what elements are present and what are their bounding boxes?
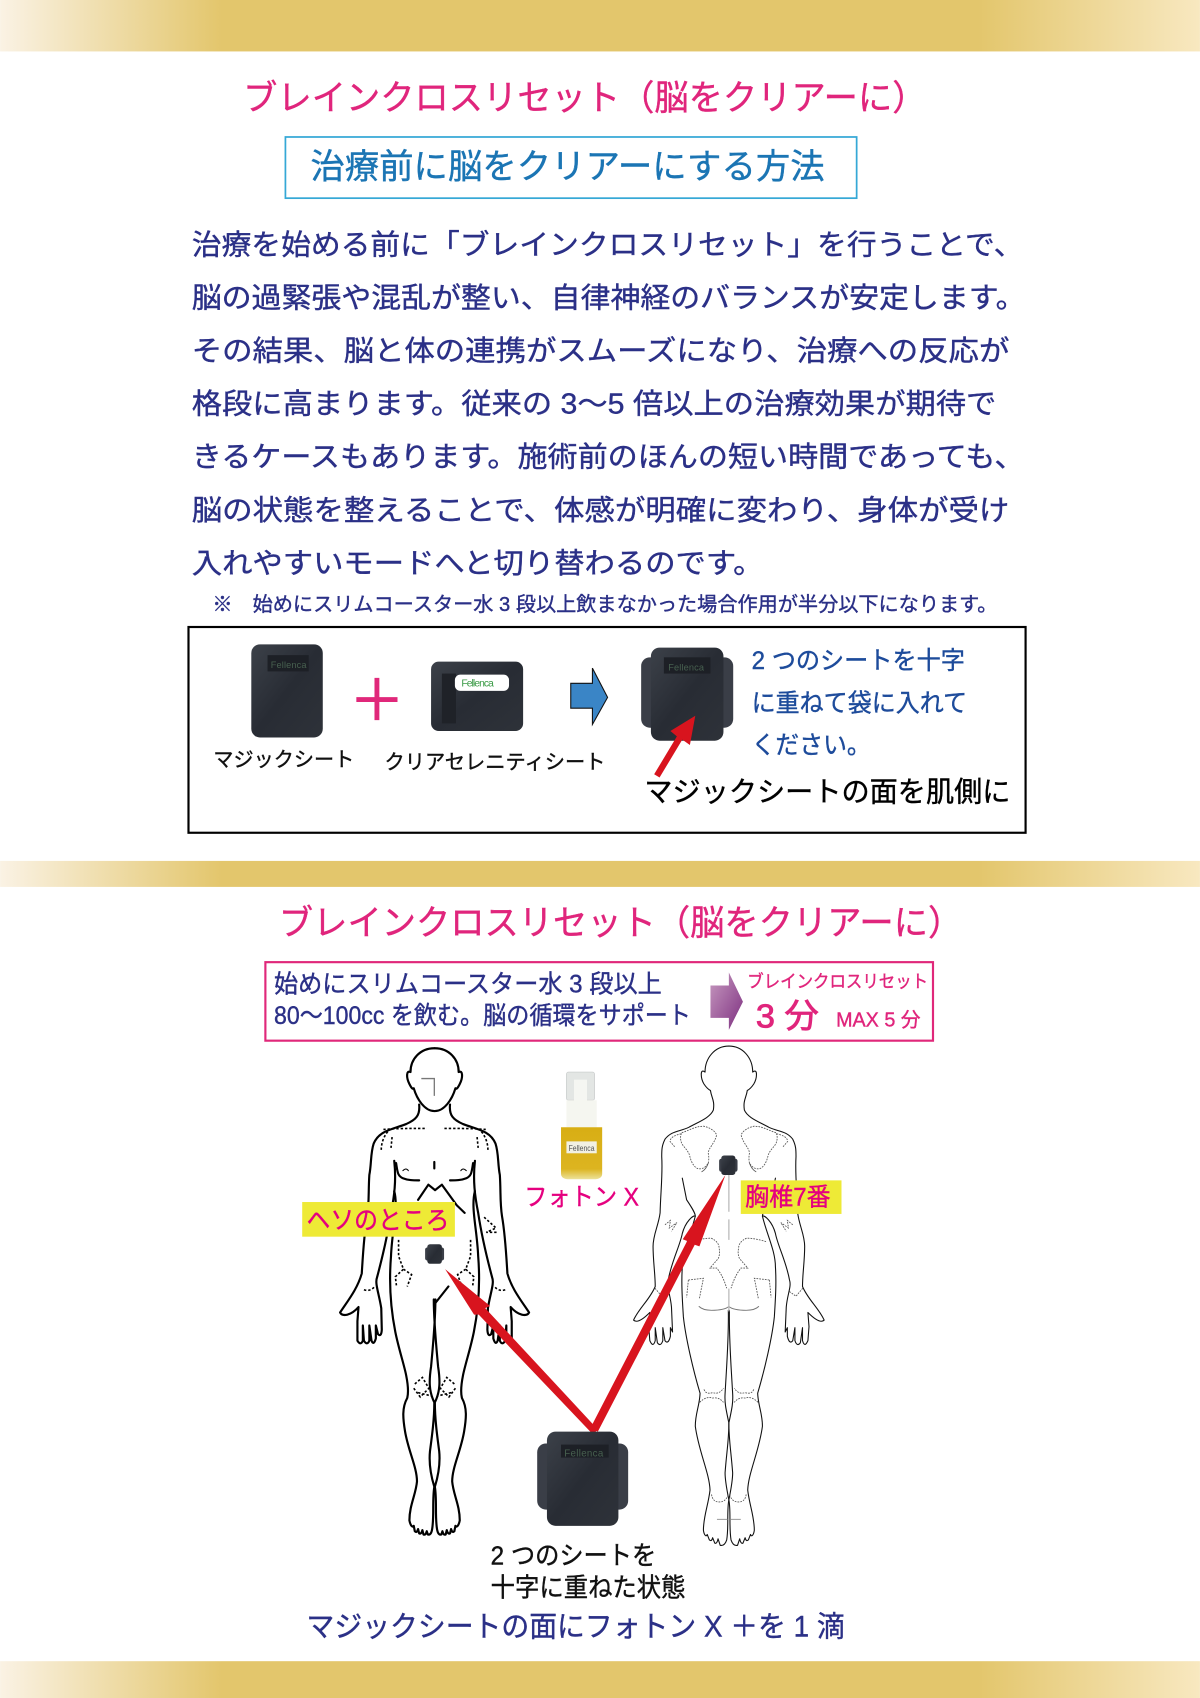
note: ※ 始めにスリムコースター水 3 段以上飲まなかった場合作用が半分以下になります。	[212, 593, 997, 616]
text: duration: 3 分	[756, 999, 819, 1036]
label: magic sheet: マジックシート	[213, 749, 354, 772]
mirrored half of the back body	[729, 1046, 824, 1545]
text: instructions	[752, 647, 967, 760]
label: photon X: フォトン X	[524, 1183, 639, 1211]
bottom gold band	[0, 1661, 1200, 1698]
title: lower section: ブレインクロスリセット（脳をクリアーに）	[279, 904, 962, 943]
text: water instruction: 80〜100cc を飲む。脳の循環をサポート	[274, 1002, 691, 1030]
label: clear serenity sheet: クリアセレニティシート	[385, 751, 605, 774]
caption: crossed sheets: 2 つのシートを	[491, 1540, 656, 1570]
icon: magic sheet	[251, 644, 323, 737]
middle gold band	[0, 861, 1200, 887]
text: instructions: ください。	[752, 732, 871, 760]
icon: magic sheet: Fellenca	[271, 660, 307, 670]
icon: photon X bottle	[561, 1072, 602, 1179]
subtitle box: 治療前に脳をクリアーにする方法	[310, 149, 825, 187]
arrow: purple	[710, 972, 743, 1030]
body paragraph: 格段に高まります。従来の 3〜5 倍以上の治療効果が期待で	[192, 389, 996, 421]
arrow: blue	[571, 668, 608, 724]
body paragraph: 入れやすいモードへと切り替わるのです。	[192, 548, 764, 580]
icon: crossed sheets large	[537, 1432, 628, 1526]
icon: clear serenity sheet: Fellenca	[461, 679, 494, 690]
icon: sheet on spine	[719, 1155, 738, 1175]
text: duration: MAX 5 分	[836, 1009, 921, 1032]
caption: crossed sheets: 十字に重ねた状態	[491, 1573, 686, 1603]
body paragraph: 脳の状態を整えることで、体感が明確に変わり、身体が受け	[192, 495, 1009, 527]
body paragraph: その結果、脳と体の連携がスムーズになり、治療への反応が	[192, 336, 1009, 368]
panel: sheets instructions	[188, 627, 1026, 833]
arrow: red pointer	[654, 716, 695, 778]
icon: sheet at navel	[425, 1244, 444, 1264]
text: instructions: 2 つのシートを十字	[752, 647, 965, 675]
body paragraph: きるケースもあります。施術前のほんの短い時間であっても、	[192, 442, 1024, 474]
arrow: to navel	[445, 1269, 598, 1434]
label: thoracic vertebra: 胸椎7番	[745, 1183, 831, 1211]
icon: crossed sheets: Fellenca	[668, 662, 705, 672]
body paragraph: 治療を始める前に「ブレインクロスリセット」を行うことで、	[192, 229, 1023, 261]
icon: plus	[356, 678, 397, 720]
subtitle box	[285, 137, 857, 198]
text: instructions: に重ねて袋に入れて	[752, 689, 967, 717]
text: duration	[747, 971, 928, 1036]
panel: water and duration	[265, 962, 933, 1041]
caption: crossed sheets	[491, 1540, 686, 1603]
title: upper section: ブレインクロスリセット（脳をクリアーに）	[243, 79, 926, 118]
body paragraph: 脳の過緊張や混乱が整い、自律神経のバランスが安定します。	[192, 283, 1026, 315]
text: duration: ブレインクロスリセット	[747, 971, 928, 992]
text: water instruction: 始めにスリムコースター水 3 段以上	[274, 970, 662, 998]
figure: front body	[340, 1048, 529, 1535]
icon: clear serenity sheet	[431, 662, 523, 731]
text: skin side note: マジックシートの面を肌側に	[644, 776, 1010, 807]
arrow: to spine	[590, 1175, 725, 1432]
figure: back body	[634, 1046, 824, 1545]
top gold band	[0, 0, 1200, 51]
caption: drop instruction: マジックシートの面にフォトン X ＋を 1 滴	[307, 1610, 845, 1643]
icon: crossed sheets large: Fellenca	[564, 1449, 604, 1460]
mirrored half of the front body	[372, 1048, 529, 1535]
icon: crossed sheets	[641, 648, 733, 741]
label: navel: ヘソのところ	[307, 1207, 449, 1235]
text: water instruction	[274, 970, 691, 1030]
body paragraph	[192, 229, 1026, 580]
icon: photon X bottle: Fellenca	[569, 1144, 595, 1153]
